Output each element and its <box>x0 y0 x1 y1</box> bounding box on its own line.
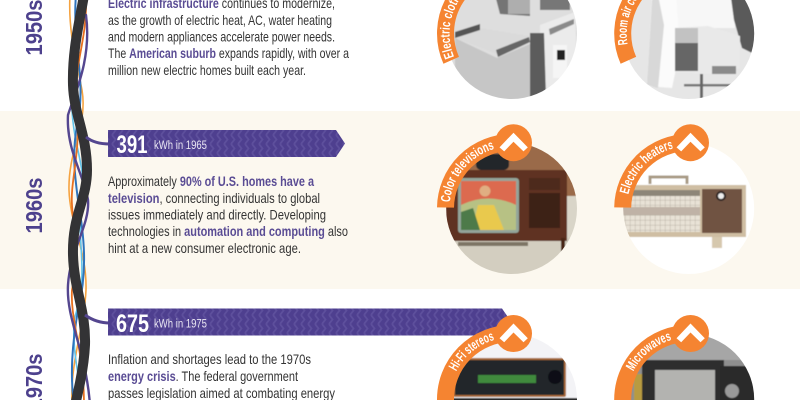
badge: up chevron <box>495 124 532 161</box>
connector: 1970s <box>85 315 110 323</box>
text block: 1960s: technologies in automation and computing also <box>108 223 348 239</box>
text block: 1970s <box>108 351 335 400</box>
panel: 1960s cream band <box>0 111 800 289</box>
photo: hi-fi stereo <box>454 338 577 400</box>
text block: 1960s: Approximately 90% of U.S. homes have a <box>108 173 314 189</box>
text block: 1950s: The American suburb expands rapidly, with over a <box>108 45 349 61</box>
decade label: 1960s: 1960s <box>21 178 47 234</box>
label band: Electric heaters: Electric heaters <box>620 142 673 194</box>
text block: 1950s: and modern appliances accelerate power needs. <box>108 28 335 44</box>
text block: 1950s <box>108 0 349 78</box>
photo: color television console <box>446 143 578 277</box>
text block: 1970s: Inflation and shortages lead to the 1970s <box>108 351 311 367</box>
label band: Microwaves <box>614 326 675 400</box>
kWh bar: 1975: kWh in 1975 <box>154 318 207 330</box>
label band: Hi-Fi stereos: Hi-Fi stereos <box>448 334 494 371</box>
text block: 1960s: hint at a new consumer electronic age. <box>108 240 301 256</box>
badge: up chevron <box>495 315 532 352</box>
text block: 1970s: energy crisis. The federal government <box>108 368 298 384</box>
badge: up chevron <box>672 315 709 352</box>
text block: 1950s: million new electric homes built each year. <box>108 62 306 78</box>
text block: 1950s: as the growth of electric heat, AC, water heating <box>108 12 332 28</box>
label band: Hi-Fi stereos <box>437 326 498 400</box>
label band: Color televisions: Color televisions <box>440 142 494 202</box>
photo: microwave oven <box>631 337 754 400</box>
photo: electric heater <box>620 143 755 275</box>
kWh bar: 1965: 391 <box>116 131 148 159</box>
kWh bar: 1975 <box>108 308 510 338</box>
photo: electric clothes dryer <box>446 0 578 100</box>
kWh bar: 1965: kWh in 1965 <box>154 140 207 152</box>
badge: up chevron <box>672 124 709 161</box>
connector: 1960s <box>86 137 110 144</box>
text block: 1960s: television, connecting individuals to global <box>108 190 320 206</box>
kWh bar: 1975: 675 <box>116 310 149 338</box>
timeline cable of twisted wires <box>68 0 90 400</box>
label band: Microwaves: Microwaves <box>626 334 671 371</box>
photo: room air conditioner <box>623 0 756 100</box>
kWh bar: 1965 <box>108 130 345 159</box>
text block: 1960s: issues immediately and directly. Developing <box>108 206 326 222</box>
text block: 1960s <box>108 173 348 256</box>
